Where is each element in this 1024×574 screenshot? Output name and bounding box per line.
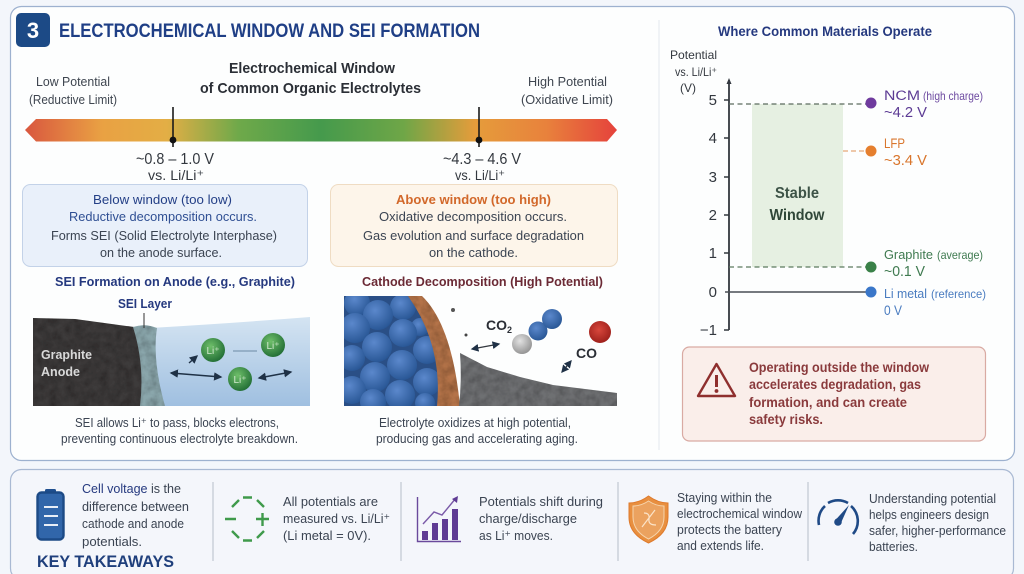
lithium ions	[201, 333, 285, 391]
section number badge: 3	[27, 18, 39, 43]
caption: SEI: SEI allows Li⁺ to pass, blocks electrons,	[75, 416, 279, 430]
takeaway: shifting potentials: charge/discharge	[479, 511, 577, 526]
takeaway: staying within window	[677, 491, 803, 553]
caption: cathode: Electrolyte oxidizes at high potential,	[379, 416, 571, 430]
axis numbers: 1	[709, 245, 717, 262]
axis numbers: 0	[709, 284, 717, 301]
label: low potential: (Reductive Limit)	[29, 93, 117, 107]
icon: warning triangle	[698, 364, 735, 396]
warning text	[749, 359, 929, 427]
heading: electrochemical window: of Common Organic Electrolytes	[200, 80, 421, 97]
point: graphite: Graphite	[884, 247, 933, 262]
gas labels: CO	[576, 345, 597, 361]
takeaway: staying within window: Staying within the	[677, 491, 772, 505]
axis numbers: −1	[700, 322, 717, 339]
point: graphite: ~0.1 V	[884, 263, 925, 280]
gas arrows	[472, 344, 571, 372]
takeaway: reference: measured vs. Li/Li⁺	[283, 511, 390, 526]
takeaway: reference	[283, 494, 390, 543]
value: low limit: ~0.8 – 1.0 V	[136, 151, 215, 168]
lithium ions: Li⁺	[233, 375, 247, 386]
point: Li metal: 0 V	[884, 302, 903, 318]
cathode particles	[344, 296, 438, 406]
axis title: (V)	[680, 81, 696, 95]
label: high potential: High Potential	[528, 75, 607, 89]
panel: main section	[10, 6, 1014, 460]
takeaway: staying within window: electrochemical window	[677, 507, 803, 521]
callout: above window: Above window (too high)	[396, 192, 551, 207]
axis title	[670, 48, 717, 95]
warning text: Operating outside the window	[749, 359, 929, 375]
heading: key takeaways: KEY TAKEAWAYS	[37, 552, 174, 571]
heading: where common materials operate: Where Common Materials Operate	[718, 24, 932, 39]
label: SEI layer: SEI Layer	[118, 296, 172, 311]
heading: cathode decomposition: Cathode Decomposition (High Potential)	[362, 274, 603, 289]
section number badge	[16, 13, 50, 47]
marker: high limit	[476, 107, 482, 147]
lithium ions: Li⁺	[266, 341, 280, 352]
point: LFP: LFP	[884, 135, 905, 151]
point: graphite	[866, 247, 983, 280]
point: LFP: ~3.4 V	[884, 152, 927, 169]
takeaway: staying within window: and extends life.	[677, 539, 764, 553]
decomposed debris	[459, 353, 617, 406]
callout: above window	[330, 184, 618, 266]
takeaway: shifting potentials: Potentials shift during	[479, 494, 603, 509]
takeaway: understanding potential: batteries.	[869, 539, 918, 554]
point: NCM	[866, 88, 983, 121]
label: graphite anode: Graphite	[41, 347, 92, 362]
reference lines	[725, 104, 871, 292]
axis numbers: 5	[709, 92, 717, 109]
warning text: safety risks.	[749, 411, 823, 427]
point: NCM: (high charge)	[923, 89, 983, 103]
takeaway: cell voltage: difference between	[82, 499, 189, 514]
label: low potential	[29, 75, 117, 107]
label: graphite anode: Anode	[41, 364, 80, 379]
warning text: formation, and can create	[749, 394, 907, 410]
label: SEI layer	[118, 296, 172, 328]
caption: SEI	[61, 416, 298, 446]
panel: key takeaways	[10, 470, 1014, 574]
takeaway: understanding potential	[869, 491, 1006, 554]
gas labels	[486, 317, 597, 361]
takeaway: reference: All potentials are	[283, 494, 378, 509]
warning text: accelerates degradation, gas	[749, 376, 921, 392]
takeaway: shifting potentials: as Li⁺ moves.	[479, 528, 553, 543]
takeaway: cell voltage: cathode and anode	[82, 516, 184, 531]
point: Li metal: Li metal	[884, 286, 927, 301]
caption: cathode	[376, 416, 578, 446]
label: high potential	[521, 75, 613, 107]
ion arrows	[171, 351, 291, 378]
icon: shield	[629, 496, 668, 543]
axis numbers: 3	[709, 169, 717, 186]
point: NCM: ~4.2 V	[884, 104, 927, 121]
value: low limit	[136, 151, 215, 183]
point: Li metal	[866, 286, 986, 318]
axis numbers: 4	[709, 130, 717, 147]
value: high limit: vs. Li/Li⁺	[455, 167, 505, 183]
callout: below window	[22, 184, 308, 266]
icon: gauge	[819, 500, 858, 534]
icon: plus minus circle	[225, 498, 269, 540]
chart: potential scale	[670, 48, 986, 339]
callout: above window: Oxidative decomposition occurs.	[379, 209, 567, 224]
takeaway: understanding potential: safer, higher-performance	[869, 523, 1006, 538]
takeaway: reference: (Li metal = 0V).	[283, 528, 371, 543]
oxidized surface layer	[408, 296, 460, 406]
takeaway: shifting potentials	[479, 494, 603, 543]
takeaway: cell voltage	[82, 481, 189, 549]
icon: rising bar chart	[418, 496, 461, 542]
caption: cathode: producing gas and accelerating aging.	[376, 432, 578, 446]
marker: low limit	[170, 107, 176, 147]
icon: battery	[38, 489, 64, 540]
stable window band: Window	[770, 207, 825, 224]
gas molecules	[451, 308, 611, 354]
takeaway: cell voltage: potentials.	[82, 534, 142, 549]
heading: electrochemical window: Electrochemical Window	[229, 60, 395, 77]
point: LFP	[866, 135, 927, 169]
illustration: SEI on graphite anode	[33, 296, 310, 406]
label: low potential: Low Potential	[36, 75, 110, 89]
caption: SEI: preventing continuous electrolyte breakdown.	[61, 432, 298, 446]
callout: below window: Below window (too low)	[93, 192, 232, 207]
point: graphite: (average)	[937, 248, 983, 262]
lithium ions: Li⁺	[206, 346, 220, 357]
axis title: vs. Li/Li⁺	[675, 65, 717, 79]
callout: below window: Reductive decomposition occurs.	[69, 209, 257, 224]
takeaway: cell voltage: Cell voltage is the	[82, 481, 181, 496]
callout: below window: on the anode surface.	[100, 245, 222, 260]
axis numbers	[700, 92, 717, 339]
callout: safety warning	[682, 347, 986, 441]
callout: above window: on the cathode.	[429, 245, 518, 260]
callout: below window: Forms SEI (Solid Electrolyte Interphase)	[51, 228, 277, 243]
stable window band: Stable	[775, 185, 819, 202]
label: graphite anode	[41, 347, 92, 379]
axis title: Potential	[670, 48, 717, 62]
value: high limit: ~4.3 – 4.6 V	[443, 151, 522, 168]
point: Li metal: (reference)	[931, 287, 986, 301]
gradient potential bar	[25, 119, 617, 142]
callout: above window: Gas evolution and surface degradation	[363, 228, 584, 243]
value: low limit: vs. Li/Li⁺	[148, 167, 204, 183]
takeaway: understanding potential: Understanding potential	[869, 491, 996, 506]
heading: electrochemical window	[200, 60, 421, 97]
axis numbers: 2	[709, 207, 717, 224]
illustration: cathode decomposition	[344, 296, 617, 406]
stable window band	[752, 104, 843, 267]
gas labels: CO	[486, 317, 507, 333]
title: ELECTROCHEMICAL WINDOW AND SEI FORMATION	[59, 21, 480, 42]
value: high limit	[443, 151, 522, 183]
point: NCM: NCM	[884, 88, 920, 103]
axis	[724, 78, 732, 330]
gas labels: 2	[507, 325, 512, 335]
takeaway: staying within window: protects the battery	[677, 523, 783, 537]
heading: SEI formation: SEI Formation on Anode (e.g., Graphite)	[55, 274, 295, 289]
takeaway: understanding potential: helps engineers design	[869, 507, 989, 522]
label: high potential: (Oxidative Limit)	[521, 93, 613, 107]
